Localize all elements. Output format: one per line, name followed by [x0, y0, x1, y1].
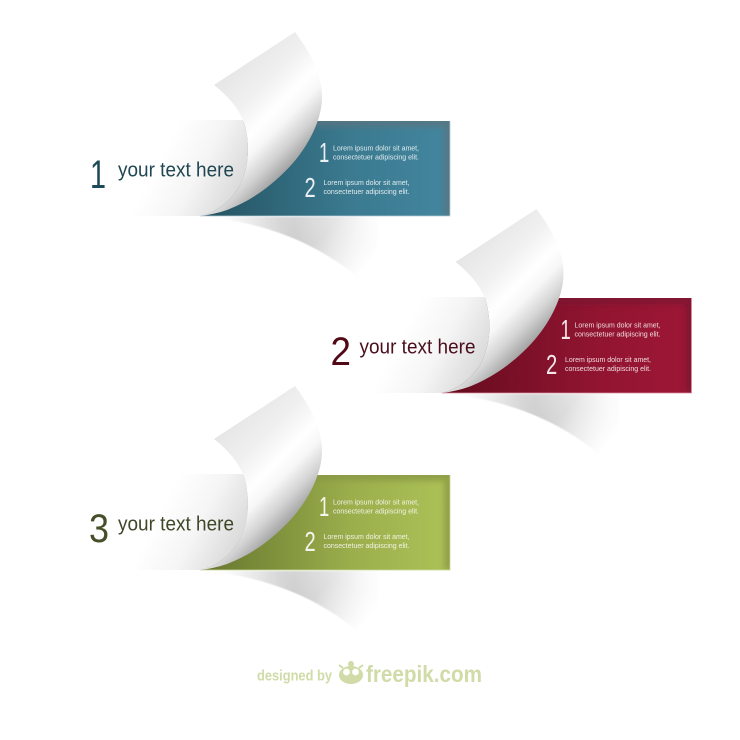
list item 2: consectetuer adipiscing elit.	[324, 187, 410, 196]
list item 1	[560, 315, 660, 346]
list item 1: 1	[319, 138, 329, 169]
list item 1: consectetuer adipiscing elit.	[574, 330, 660, 338]
list item 2: 2	[304, 173, 316, 204]
colored bar 3	[200, 475, 450, 570]
list item 1: consectetuer adipiscing elit.	[333, 152, 419, 162]
list item 1	[319, 492, 419, 523]
page curl 2	[442, 209, 564, 393]
page curl 1	[200, 32, 322, 216]
list item 2: Lorem ipsum dolor sit amet,	[565, 355, 651, 364]
list item 2: Lorem ipsum dolor sit amet,	[324, 532, 410, 541]
heading: number 3: 3	[89, 507, 109, 551]
heading: number 1: 1	[90, 152, 106, 197]
list item 2: 2	[546, 350, 557, 381]
panel: step 1	[90, 32, 450, 280]
panel: step 3	[89, 386, 450, 634]
list item 1: 1	[560, 315, 571, 346]
list item 2	[304, 527, 410, 558]
list item 2: 2	[304, 527, 316, 558]
footer: designed by freepik.com	[257, 661, 482, 687]
list item 1	[319, 138, 419, 169]
heading: your text here 2: your text here	[360, 336, 476, 358]
panel: step 2	[330, 209, 692, 457]
list item 1: 1	[319, 492, 329, 523]
page flap 3	[128, 474, 248, 570]
list item 2: consectetuer adipiscing elit.	[324, 541, 410, 550]
list item 1: Lorem ipsum dolor sit amet,	[574, 320, 660, 330]
page flap 1	[128, 120, 248, 216]
list item 2: Lorem ipsum dolor sit amet,	[324, 178, 410, 187]
list item 2: consectetuer adipiscing elit.	[565, 364, 651, 373]
list item 2	[546, 350, 651, 381]
credit text: designed by	[257, 668, 332, 684]
curl shadow 2	[454, 394, 620, 457]
list item 2	[304, 173, 410, 204]
heading: number 2: 2	[330, 330, 351, 374]
list item 1: consectetuer adipiscing elit.	[333, 506, 419, 516]
brand name: freepik.com	[366, 661, 482, 687]
curl shadow 3	[213, 571, 378, 634]
list item 1: Lorem ipsum dolor sit amet,	[333, 144, 419, 152]
heading: your text here 3: your text here	[118, 512, 234, 536]
colored bar 2	[442, 298, 692, 393]
page curl 3	[200, 386, 322, 570]
icon: freepik mascot	[339, 661, 363, 684]
colored bar 1	[200, 121, 450, 216]
heading: your text here 1: your text here	[118, 158, 234, 182]
curl shadow 1	[213, 217, 378, 280]
list item 1: Lorem ipsum dolor sit amet,	[333, 498, 419, 506]
page flap 2	[370, 297, 489, 393]
